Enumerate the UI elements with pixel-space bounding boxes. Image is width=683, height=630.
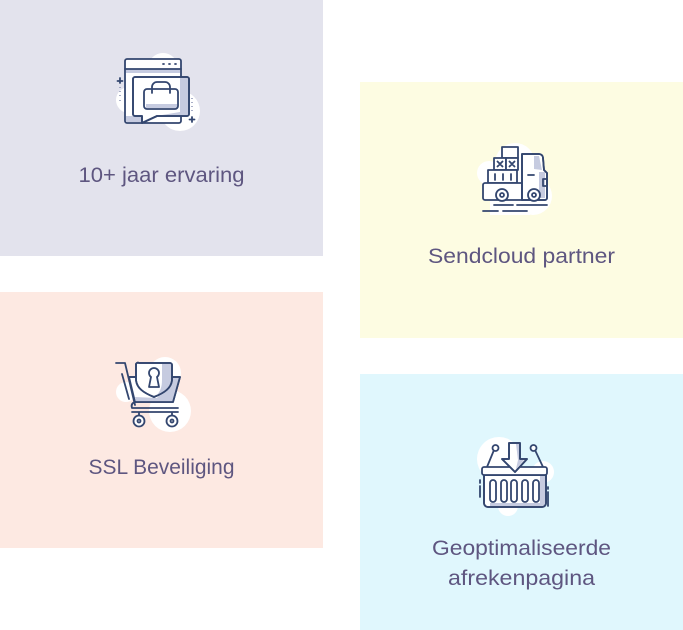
label: afrekenpagina bbox=[448, 567, 595, 590]
panel: Geoptimaliseerde afrekenpagina bbox=[360, 374, 683, 630]
panel: 10+ jaar ervaring bbox=[0, 0, 323, 256]
label: Sendcloud partner bbox=[428, 245, 615, 268]
panel: Sendcloud partner bbox=[360, 82, 683, 338]
label: SSL Beveiliging bbox=[88, 456, 234, 479]
panel: SSL Beveiliging bbox=[0, 292, 323, 548]
label: 10+ jaar ervaring bbox=[78, 164, 244, 187]
icon: delivery truck bbox=[477, 143, 552, 215]
label: Geoptimaliseerde bbox=[432, 537, 611, 560]
icon: shopping cart with shield bbox=[116, 357, 191, 432]
icon: basket with download arrow bbox=[477, 437, 554, 516]
icon: shopping bag in chat window bbox=[116, 53, 200, 131]
label bbox=[432, 537, 611, 590]
